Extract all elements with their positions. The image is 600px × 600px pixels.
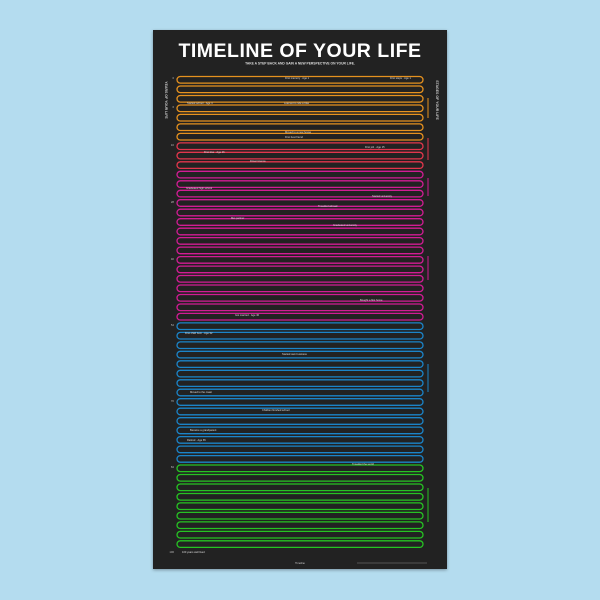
event labels: First best friend — [285, 135, 303, 139]
event labels: Retired · Age 65 — [187, 438, 206, 442]
event labels — [182, 76, 411, 554]
footer: Timeline — [295, 561, 305, 565]
event labels: Driver licence — [250, 159, 266, 163]
age labels: 100 — [169, 550, 174, 554]
event labels: Became a grandparent — [190, 428, 217, 432]
age labels: 16 — [171, 143, 174, 147]
age labels: 70 — [171, 399, 174, 403]
event labels: Started school · Age 4 — [187, 101, 213, 105]
event labels: Bought a first home — [360, 298, 383, 302]
event labels: Travelled abroad — [318, 204, 338, 208]
age labels: 6 — [172, 105, 174, 109]
age labels: 28 — [171, 200, 174, 204]
age labels: 54 — [171, 323, 174, 327]
event labels: Graduated university — [333, 223, 358, 227]
event labels: First memory · Age 1 — [285, 76, 310, 80]
event labels: Children finished school — [262, 408, 290, 412]
event labels: First child born · Age 32 — [185, 331, 213, 335]
event labels: Got married · Age 30 — [235, 313, 260, 317]
event labels: Travelled the world — [352, 462, 374, 466]
event labels: First kiss · Age 16 — [204, 150, 225, 154]
timeline loops — [177, 76, 423, 547]
title: TIMELINE OF YOUR LIFE — [178, 40, 422, 62]
event labels: 100 years well lived — [182, 550, 205, 554]
age labels — [169, 76, 174, 554]
stage bars — [427, 98, 429, 522]
age labels: 0 — [172, 76, 174, 80]
event labels: First steps · Age 1 — [390, 76, 411, 80]
event labels: Moved to the coast — [190, 390, 212, 394]
event labels: Started own business — [282, 352, 308, 356]
age labels: 84 — [171, 465, 174, 469]
event labels: Met partner — [231, 216, 244, 220]
event labels: Graduated high school — [186, 186, 213, 190]
age labels: 40 — [171, 257, 174, 261]
side label left: YEARS OF YOUR LIFE — [164, 81, 168, 119]
event labels: Learned to ride a bike — [284, 101, 310, 105]
side label right: STAGES OF YOUR LIFE — [435, 80, 439, 120]
event labels: Started university — [372, 194, 393, 198]
event labels: First job · Age 15 — [365, 145, 385, 149]
event labels: Moved to a new house — [285, 130, 312, 134]
subtitle: TAKE A STEP BACK AND GAIN A NEW PERSPECTIVE ON YOUR LIFE. — [245, 62, 355, 66]
